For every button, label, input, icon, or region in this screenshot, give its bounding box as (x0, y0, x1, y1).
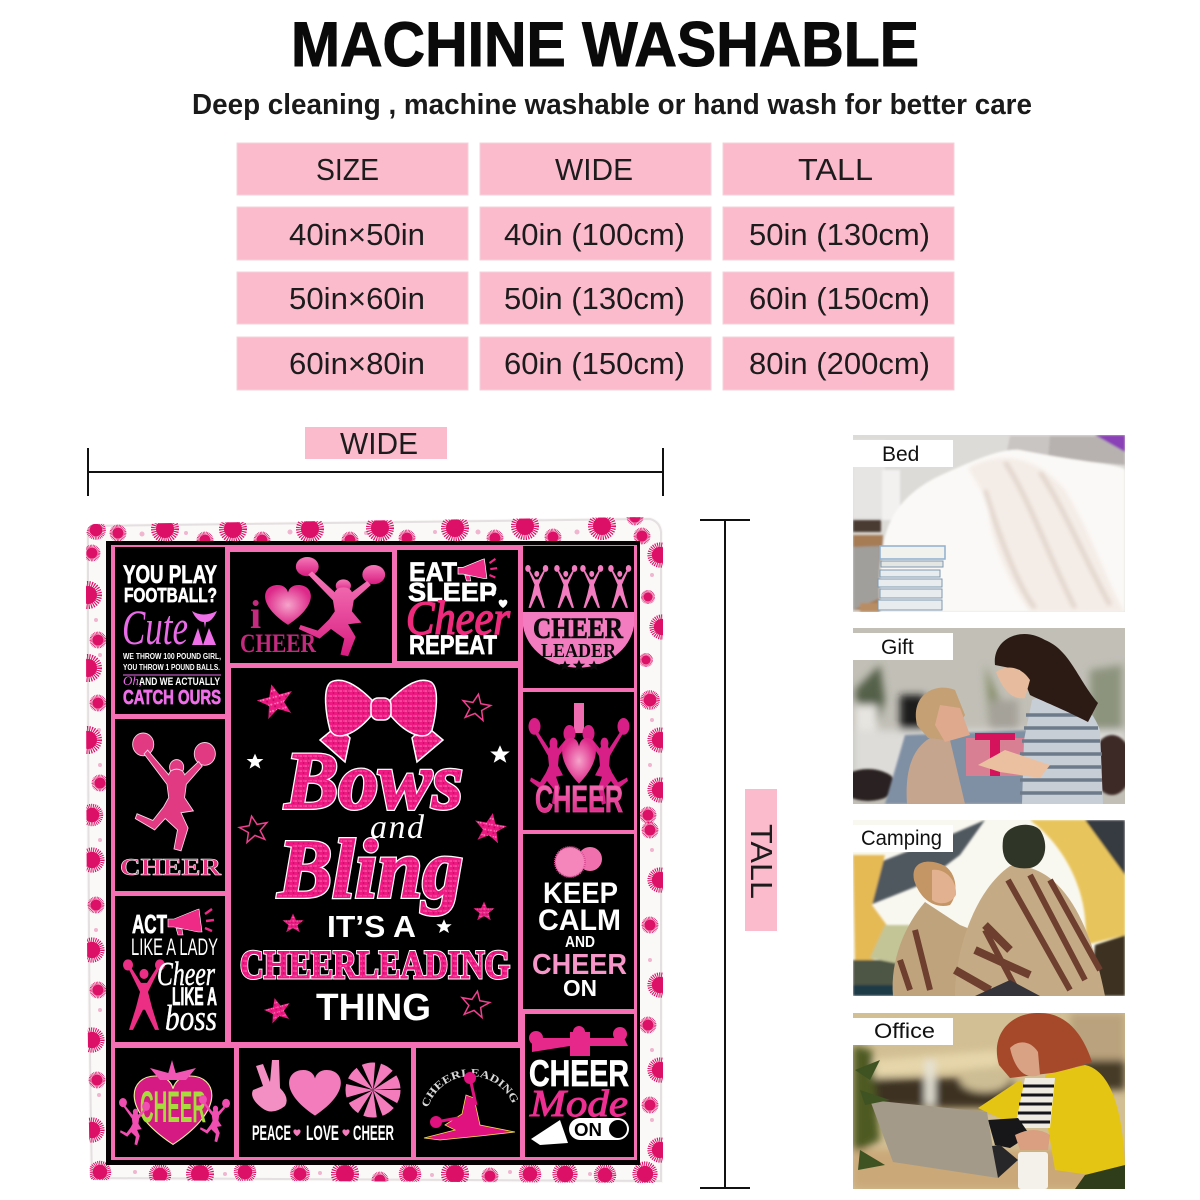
table rows: 50in×60in (289, 281, 425, 316)
panel: eat sleep cheer repeat: EAT (409, 557, 457, 587)
height dimension (700, 520, 779, 1188)
photo: office (853, 1013, 1125, 1189)
panel: cheer leader badge: CHEER (533, 612, 623, 645)
panel: keep calm: AND (565, 934, 595, 951)
panel: you play football: Oh, (123, 673, 142, 688)
panel: keep calm: KEEP (543, 877, 618, 910)
text: bows and bling: Bows (284, 735, 463, 826)
panel: you play football: YOU THROW 1 POUND BALLS. (123, 663, 220, 672)
title: MACHINE WASHABLE (291, 10, 919, 80)
panel: cheer heart (115, 1048, 234, 1157)
icons: stars (238, 680, 510, 1025)
height dimension: TALL (744, 824, 779, 899)
panel: bows and bling centre (231, 668, 518, 1042)
icon: glitter bow (320, 680, 443, 762)
panel: cheer heart: CHEER (140, 1081, 206, 1132)
panel: cheer mode on: ON (574, 1120, 602, 1140)
panel: you play football: YOU PLAY (123, 561, 217, 589)
panel: peace love cheer: CHEER (353, 1122, 394, 1145)
text: bows and bling: Bling (277, 823, 463, 916)
panel: i heart cheer: CHEER (240, 629, 316, 658)
panel: you play football: CATCH OURS (123, 687, 221, 709)
panel: cheer leader badge: LEADER (541, 640, 616, 662)
blanket border print (77, 510, 672, 1190)
text: bows and bling: and (370, 809, 425, 846)
panel: act like a lady: LIKE A LADY (131, 934, 218, 961)
panel: cheerleading gymnast (416, 1048, 520, 1157)
panel: eat sleep cheer repeat: REPEAT (409, 630, 497, 660)
panel: i heart cheer (230, 552, 392, 663)
panel: you play football: FOOTBALL? (124, 585, 217, 607)
table rows: 80in (200cm) (749, 346, 930, 381)
icon: pompom (359, 1076, 387, 1104)
panel: you play football (115, 547, 225, 714)
panel: act like a lady: boss (165, 998, 217, 1038)
table rows: 60in×80in (289, 346, 425, 381)
photo: bed (853, 435, 1125, 612)
panel: i love cheer dancers: CHEER (535, 779, 623, 821)
table header: SIZE (316, 152, 379, 187)
label: bed (853, 440, 953, 467)
text: bows and bling: IT’S A (327, 909, 416, 944)
table header (316, 152, 873, 187)
panel: eat sleep cheer repeat (397, 550, 518, 661)
panel: act like a lady (115, 896, 225, 1042)
panel: eat sleep cheer repeat: Cheer (406, 592, 510, 645)
panel: keep calm: CALM (538, 904, 621, 937)
photo: camping (853, 820, 1125, 996)
panel: you play football: Cute (122, 599, 188, 655)
panel: keep calm (523, 834, 634, 1009)
label: bed: Bed (882, 443, 919, 466)
label: office (853, 1018, 953, 1045)
panel: cheer mode on: CHEER (529, 1053, 629, 1094)
panel: peace love cheer: LOVE (306, 1122, 339, 1145)
width dimension: WIDE (340, 426, 418, 461)
panel: eat sleep cheer repeat: SLEEP (408, 577, 497, 607)
panel: keep calm: ON (563, 975, 597, 1001)
panel: peace love cheer (239, 1048, 411, 1157)
subtitle: Deep cleaning , machine washable or hand wash for better care (192, 89, 1032, 121)
label: gift: Gift (881, 636, 914, 659)
photo: gift (840, 628, 1132, 804)
panel: cheer leader badge (523, 546, 634, 688)
panel: jumping cheerleader: CHEER (120, 855, 222, 881)
label: gift (853, 633, 953, 660)
blanket quilt panel base (106, 541, 640, 1165)
table rows: 60in (150cm) (749, 281, 930, 316)
table rows: 50in (130cm) (504, 281, 685, 316)
blanket (86, 517, 663, 1183)
panel: you play football: WE THROW 100 POUND GIRL, (123, 652, 221, 661)
text: bows and bling: THING (316, 987, 431, 1029)
table rows: 50in (130cm) (749, 217, 930, 252)
size table (237, 143, 954, 390)
table rows: 40in×50in (289, 217, 425, 252)
panel: cheer mode on (525, 1014, 634, 1157)
panel: i love cheer dancers (523, 692, 634, 830)
label: camping: Camping (861, 827, 942, 850)
table header: WIDE (555, 152, 633, 187)
panel: i heart cheer: i (250, 592, 261, 637)
label: office: Office (874, 1020, 935, 1043)
table header: TALL (798, 152, 873, 187)
panel: act like a lady: ACT (132, 909, 167, 939)
panel: act like a lady: Cheer (157, 956, 216, 993)
width dimension (88, 426, 663, 496)
icon: peace hand (252, 1060, 287, 1112)
text: bows and bling: CHEERLEADING (240, 942, 510, 987)
text: bows and bling (240, 735, 510, 1029)
text: bows and bling: Bling (277, 823, 463, 916)
panel: keep calm: CHEER (532, 949, 627, 981)
text: bows and bling: CHEERLEADING (240, 942, 510, 987)
panel: jumping cheerleader (115, 719, 225, 891)
panel: cheerleading gymnast: CHEERLEADING (422, 1068, 518, 1106)
panel: act like a lady: LIKE A (172, 983, 217, 1011)
panel: peace love cheer: PEACE (252, 1122, 291, 1145)
panel: cheer mode on: Mode (529, 1083, 628, 1125)
table rows: 40in (100cm) (504, 217, 685, 252)
icon: heart (289, 1070, 341, 1116)
text: bows and bling: Bows (284, 735, 463, 826)
panel: you play football: AND WE ACTUALLY (139, 676, 221, 688)
table rows: 60in (150cm) (504, 346, 685, 381)
table rows (289, 217, 930, 381)
